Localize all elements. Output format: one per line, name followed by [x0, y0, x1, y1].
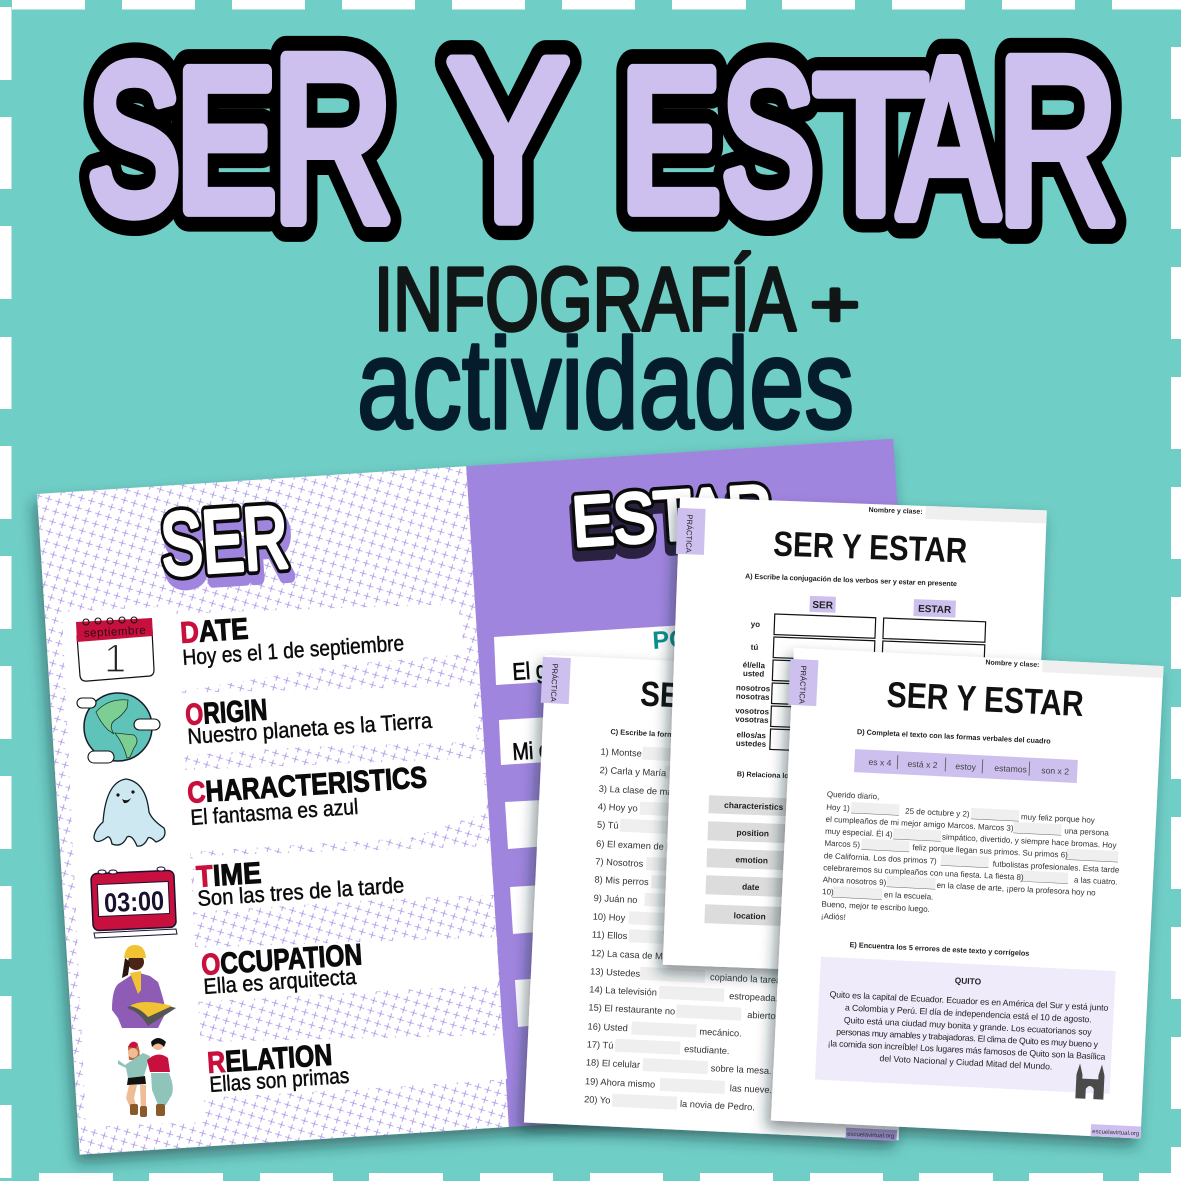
title: Y — [448, 12, 568, 267]
row: origin: ORIGIN — [184, 694, 268, 732]
quito text box: del Voto Nacional y Ciudad Mitad del Mundo. — [879, 1053, 1053, 1072]
exercise list: 4) Hoy yo — [598, 802, 638, 813]
exercise list: 5) Tú — [597, 820, 619, 831]
worksheet title: SER Y ESTAR — [639, 675, 835, 723]
estar row bands — [494, 624, 702, 1027]
heading: SER: SER — [161, 496, 295, 603]
exercise list: la novia de Pedro. — [680, 1099, 755, 1112]
conjugation table: ustedes — [736, 739, 767, 749]
exercise list: 12) La casa de María — [591, 948, 680, 962]
letter text: 25 de octubre y 2) — [905, 807, 970, 819]
row: time: TIME — [195, 857, 262, 894]
icon: clock — [91, 867, 177, 938]
label: ESTAR — [913, 599, 956, 618]
estar band text — [512, 619, 773, 766]
conjugation table: nosotras — [736, 692, 770, 702]
icon: architect woman — [112, 945, 176, 1028]
title: R — [272, 9, 393, 270]
exercise list: 16) Usted — [587, 1021, 628, 1033]
tab: práctica: PRÁCTICA — [797, 665, 808, 705]
tab: práctica — [676, 508, 706, 555]
word bank: son x 2 — [1041, 765, 1069, 777]
word bank: estoy — [955, 761, 977, 772]
quito text box — [815, 957, 1116, 1094]
tab: práctica: PRÁCTICA — [549, 663, 560, 703]
white icon column and row bands — [62, 604, 507, 1127]
conjugation table: él/ella — [743, 660, 766, 670]
exercise list: 20) Yo — [584, 1094, 611, 1106]
exercise list: 19) Ahora mismo — [585, 1076, 655, 1090]
letter text: Hoy 1) — [826, 803, 850, 813]
instruction A: A) Escribe la conjugación de los verbos ser y estar en presente — [745, 571, 957, 588]
footer tag: escuelavirtual.org — [847, 1132, 894, 1140]
category bars: emotion — [735, 854, 768, 865]
exercise list: 17) Tú — [586, 1039, 614, 1051]
exercise list: 14) La televisión — [589, 984, 657, 998]
exercise list — [584, 745, 793, 1114]
letter text: futbolistas profesionales. Esta tarde — [992, 859, 1120, 875]
icon: calendar — [76, 617, 154, 681]
heading: SER — [158, 487, 295, 603]
row: origin: Nuestro planeta es la Tierra — [187, 708, 433, 749]
exercise list: 6) El examen de la clase — [596, 839, 698, 853]
letter text: Querido diario, — [827, 790, 880, 801]
instruction E: E) Encuentra los 5 errores de este texto y corrígelos — [849, 940, 1030, 958]
worksheet: D and E exercises (front) — [768, 648, 1164, 1139]
footer tag: escuelavirtual.org — [1092, 1129, 1139, 1137]
page — [524, 655, 921, 1140]
letter text: celebraremos su cumpleaños con una fiesta. La fiesta 8) — [823, 863, 1024, 882]
word bank: estamos — [994, 763, 1027, 775]
letter text: feliz porque llegan sus primos. Su primos 6) — [912, 843, 1068, 860]
name field: Nombre y clase: — [868, 507, 923, 516]
instruction B: B) Relaciona los usos — [737, 769, 812, 781]
row: relation — [206, 1039, 350, 1097]
footer tag — [846, 1128, 897, 1141]
exercise list: 1) Montse — [600, 747, 642, 759]
title: E — [620, 28, 720, 253]
conjugation table: vosotras — [735, 715, 769, 725]
exercise list: 7) Nosotros — [595, 857, 644, 869]
title: R — [272, 9, 393, 270]
title — [88, 9, 1118, 272]
letter text: a las cuatro. — [1074, 875, 1118, 887]
conjugation table: ellos/as — [736, 730, 767, 740]
letter text: Ahora nosotros 9) — [822, 875, 887, 887]
exercise list: 2) Carla y María — [599, 765, 667, 778]
title: S — [88, 23, 180, 256]
word bank: está x 2 — [907, 759, 938, 770]
word bank — [854, 749, 1078, 783]
icon: basilica — [1075, 1063, 1105, 1100]
exercise list: abierto. — [747, 1010, 778, 1021]
letter text: Marcos 5) — [824, 839, 861, 849]
category bars — [704, 795, 799, 926]
row: relation: Ellas son primas — [209, 1063, 350, 1097]
title: S — [722, 23, 814, 256]
exercise list: 11) Ellos — [592, 929, 628, 941]
exercise list: estropeada. — [729, 991, 778, 1003]
letter text: el cumpleaños de mi mejor amigo Marcos. Marcos 3) — [825, 815, 1014, 833]
row: characteristics — [186, 761, 428, 830]
word bank: es x 4 — [868, 757, 892, 768]
infographic sheet — [37, 439, 936, 1155]
title: A — [899, 14, 998, 264]
letter text: una persona — [1064, 826, 1110, 838]
title: S — [88, 23, 180, 256]
letter text: ¡Adiós! — [821, 912, 846, 922]
conjugation table: tú — [751, 643, 759, 652]
row: relation: RELATION — [206, 1039, 333, 1080]
icon: two cousins — [118, 1038, 173, 1117]
page — [771, 648, 1164, 1139]
exercise list: estudiante. — [684, 1044, 730, 1056]
heading: ESTAR: ESTAR — [570, 470, 775, 561]
exercise list: 15) El restaurante no — [588, 1002, 675, 1016]
label: SER — [809, 596, 836, 613]
row: occupation: Ella es arquitecta — [203, 964, 358, 999]
subtitle: actividades: actividades — [357, 313, 854, 456]
tab: práctica — [788, 659, 818, 706]
row: date: DATE — [179, 613, 249, 650]
letter text: en la clase de arte, ¡pero la profesora hoy no — [936, 881, 1096, 898]
title: E — [620, 28, 720, 253]
instruction D: D) Completa el texto con las formas verbales del cuadro — [857, 727, 1052, 746]
exercise list: sobre la mesa. — [710, 1063, 772, 1076]
exercise list: 13) Ustedes — [590, 966, 641, 979]
title: T — [814, 35, 928, 255]
tab: práctica — [541, 657, 571, 704]
category bars: position — [736, 827, 769, 838]
quito text box: Quito está una ciudad muy bonita y grande. Los ecuatorianos soy — [844, 1015, 1092, 1037]
title: R — [997, 11, 1118, 272]
title: E — [176, 28, 276, 253]
row: time — [195, 857, 405, 911]
exercise list: 18) El celular — [586, 1057, 640, 1070]
letter text: simpático, divertido, y siempre hace bromas. Hoy — [942, 832, 1117, 850]
icon: clock: 03:00 — [103, 886, 165, 918]
title: S — [722, 23, 814, 256]
conjugation table: yo — [751, 620, 760, 629]
exercise list: 8) Mis perros — [594, 875, 649, 887]
footer tag — [1091, 1124, 1141, 1139]
icon: calendar: 1 — [104, 637, 126, 681]
conjugation table — [734, 613, 986, 757]
title: Y — [448, 12, 568, 267]
estar band text: Mi casa — [512, 735, 582, 766]
worksheet title: SER Y ESTAR — [773, 524, 968, 571]
page — [663, 497, 1047, 978]
letter text: de California. Los dos primos 7) — [824, 851, 937, 866]
title: T — [814, 35, 928, 255]
quito text box: a Colombia y Perú. El día de independencia está el 10 de agosto. — [845, 1002, 1092, 1024]
letter text — [821, 790, 1123, 935]
icon: ghost — [94, 779, 165, 846]
exercise list: las nueve. — [730, 1083, 772, 1095]
quito text box: Quito es la capital de Ecuador. Ecuador es en América del Sur y está junto — [829, 989, 1109, 1013]
worksheet title: SER Y ESTAR — [886, 674, 1085, 724]
heading: SER: SER — [158, 487, 291, 594]
icon: calendar: septiembre — [84, 625, 146, 640]
subtitle: infografía: + — [810, 268, 860, 340]
conjugation table: nosotros — [736, 683, 771, 693]
heading: ESTAR: ESTAR — [569, 480, 773, 571]
heading: SER: SER — [158, 487, 291, 594]
letter text: Bueno, mejor te escribo luego. — [821, 900, 930, 914]
icon: earth — [77, 693, 160, 763]
name field: Nombre y clase: — [985, 659, 1040, 669]
category bars: date — [742, 882, 760, 892]
sheet base — [37, 439, 936, 1155]
estar band text: POSITION — [652, 619, 773, 655]
category bars: location — [733, 910, 766, 921]
category bars: characteristics — [724, 800, 784, 812]
label: SER: SER — [812, 600, 834, 612]
quito text box: personas muy amables y trabajadoras. El clima de Quito es muy bueno y — [836, 1027, 1099, 1049]
worksheet: C exercise (back) — [521, 655, 921, 1141]
conjugation table: vosotros — [735, 706, 770, 716]
quito text box: ¡la comida son increíble! Los lugares más famosos de Quito son la Basílica — [827, 1038, 1106, 1062]
conjugation table: usted — [743, 669, 765, 679]
letter text: en la escuela. — [884, 890, 934, 902]
row: occupation: OCCUPATION — [200, 938, 363, 982]
exercise list: 3) La clase de matemáticas — [599, 784, 713, 799]
grid pattern — [37, 466, 509, 1155]
title: R — [997, 11, 1118, 272]
row: characteristics: El fantasma es azul — [190, 794, 359, 830]
label: ESTAR: ESTAR — [918, 604, 952, 616]
title: A — [899, 14, 998, 264]
row: characteristics: CHARACTERISTICS — [186, 761, 428, 810]
instruction C: C) Escribe la forma correcta — [610, 727, 710, 741]
letter text: 10) — [822, 887, 834, 897]
tab: práctica: PRÁCTICA — [684, 514, 694, 554]
exercise list: 10) Hoy — [592, 911, 626, 923]
letter text: muy feliz porque hoy — [1021, 812, 1095, 825]
row: time: Son las tres de la tarde — [197, 872, 405, 911]
exercise list: mecánico. — [699, 1027, 742, 1039]
estar band text: El gato — [512, 655, 575, 686]
exercise list: 9) Juán no — [593, 893, 638, 905]
row: date — [179, 613, 405, 670]
row: occupation — [200, 938, 363, 999]
name field — [868, 504, 1047, 523]
heading: ESTAR: ESTAR — [570, 470, 775, 561]
worksheet: A and B exercises (middle) — [661, 497, 1047, 978]
name field — [985, 657, 1164, 678]
exercise list: copiando la tarea — [710, 972, 782, 985]
row: date: Hoy es el 1 de septiembre — [182, 630, 405, 670]
subtitle: infografía: INFOGRAFÍA — [374, 250, 796, 350]
title: E — [176, 28, 276, 253]
quito text box: QUITO — [955, 975, 982, 987]
letter text: muy especial. Él 4) — [825, 827, 893, 839]
